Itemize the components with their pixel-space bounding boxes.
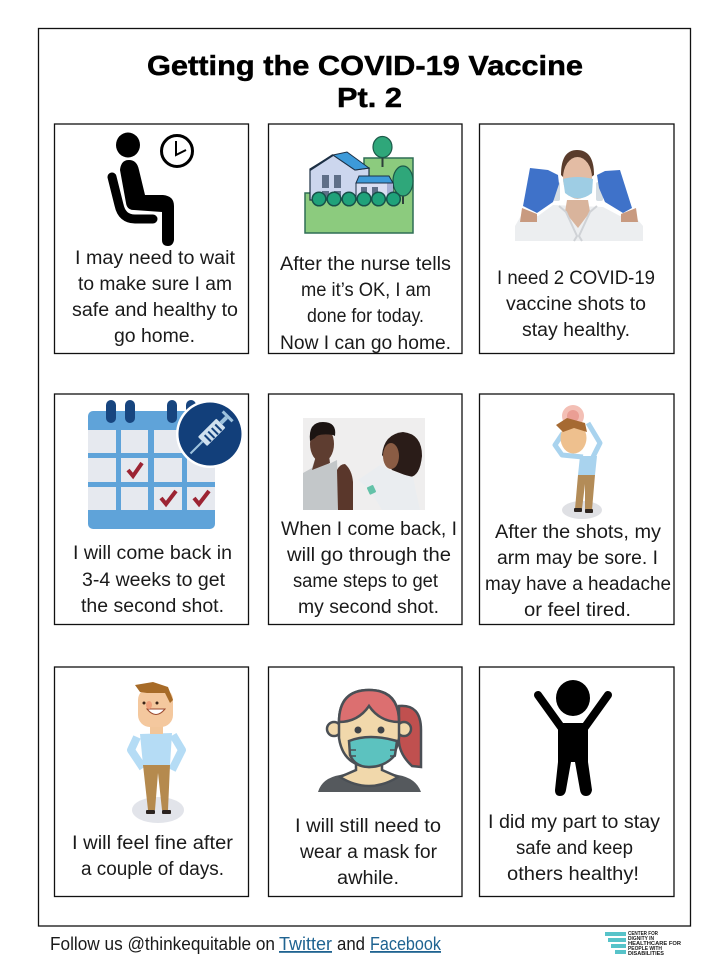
text: go home.: [114, 326, 195, 347]
text: [280, 254, 451, 354]
text: may have a headache: [485, 574, 671, 595]
panel: did my part: [480, 667, 674, 896]
footer: social links: and: [337, 934, 365, 954]
panel: two shots: [480, 124, 674, 354]
footer: social links: [50, 934, 442, 954]
icon: house with lawn: [305, 136, 413, 233]
panel: feel fine: [54, 667, 248, 896]
footer: social links: Facebook: [370, 934, 442, 954]
text: a couple of days.: [81, 859, 224, 880]
text: arm may be sore. I: [497, 548, 658, 569]
logo: Center for Dignity in Healthcare for People with Disabilities: [605, 931, 681, 957]
panel: go home: [268, 124, 462, 354]
text: or feel tired.: [524, 600, 631, 621]
panel: wait after the shot: [54, 124, 248, 354]
logo: Center for Dignity in Healthcare for People with Disabilities: PEOPLE WITH: [628, 946, 662, 952]
logo: Center for Dignity in Healthcare for People with Disabilities: CENTER FOR: [628, 931, 658, 937]
text: [281, 519, 457, 618]
panel: side effects: [480, 394, 674, 624]
text: I need 2 COVID-19: [497, 268, 655, 289]
icon: man with headache: [555, 405, 602, 519]
text: I will come back in: [73, 543, 232, 564]
panel: same steps: [268, 394, 462, 624]
text: [72, 833, 234, 880]
text: stay healthy.: [522, 320, 630, 341]
text: I will feel fine after: [72, 833, 234, 854]
text: safe and healthy to: [72, 300, 238, 321]
text: 3-4 weeks to get: [82, 570, 226, 591]
text: same steps to get: [293, 571, 439, 592]
photo: nurse vaccinating a man: [303, 418, 425, 510]
text: [485, 522, 671, 621]
text: Now I can go home.: [280, 333, 451, 354]
text: When I come back, I: [281, 519, 457, 540]
text: [488, 812, 661, 885]
logo: Center for Dignity in Healthcare for People with Disabilities: HEALTHCARE FOR: [628, 941, 681, 947]
text: awhile.: [337, 868, 399, 889]
panel: wear a mask: [268, 667, 462, 896]
logo: Center for Dignity in Healthcare for People with Disabilities: DIGNITY IN: [628, 936, 654, 942]
text: I may need to wait: [75, 248, 236, 269]
text: vaccine shots to: [506, 294, 646, 315]
text: my second shot.: [298, 597, 439, 618]
text: [295, 816, 441, 889]
title: Pt. 2: [337, 82, 402, 113]
text: [72, 248, 238, 347]
text: [73, 543, 232, 617]
text: the second shot.: [81, 596, 224, 617]
text: After the nurse tells: [280, 254, 451, 275]
text: will go through the: [286, 545, 451, 566]
text: [497, 268, 655, 341]
text: me it’s OK, I am: [301, 280, 431, 301]
text: After the shots, my: [495, 522, 662, 543]
logo: Center for Dignity in Healthcare for People with Disabilities: DISABILITIES: [628, 951, 664, 957]
icon: smiling man: [131, 682, 184, 823]
text: wear a mask for: [299, 842, 438, 863]
text: others healthy!: [507, 864, 639, 885]
footer: social links: Twitter: [279, 934, 332, 954]
icon: woman in mask: [318, 690, 421, 792]
footer: social links: Follow us @thinkequitable on: [50, 934, 275, 954]
text: I did my part to stay: [488, 812, 661, 833]
icon: figure with raised arms: [538, 680, 608, 796]
icon: person seated with clock: [112, 132, 192, 246]
text: to make sure I am: [78, 274, 232, 295]
text: I will still need to: [295, 816, 441, 837]
text: safe and keep: [516, 838, 633, 859]
icon: calendar with syringe: [88, 400, 244, 529]
title: [147, 50, 583, 113]
text: done for today.: [307, 306, 424, 327]
title: Getting the COVID-19 Vaccine: [147, 50, 583, 81]
icon: nurse holding vials: [515, 150, 643, 241]
panel: come back: [54, 394, 248, 624]
